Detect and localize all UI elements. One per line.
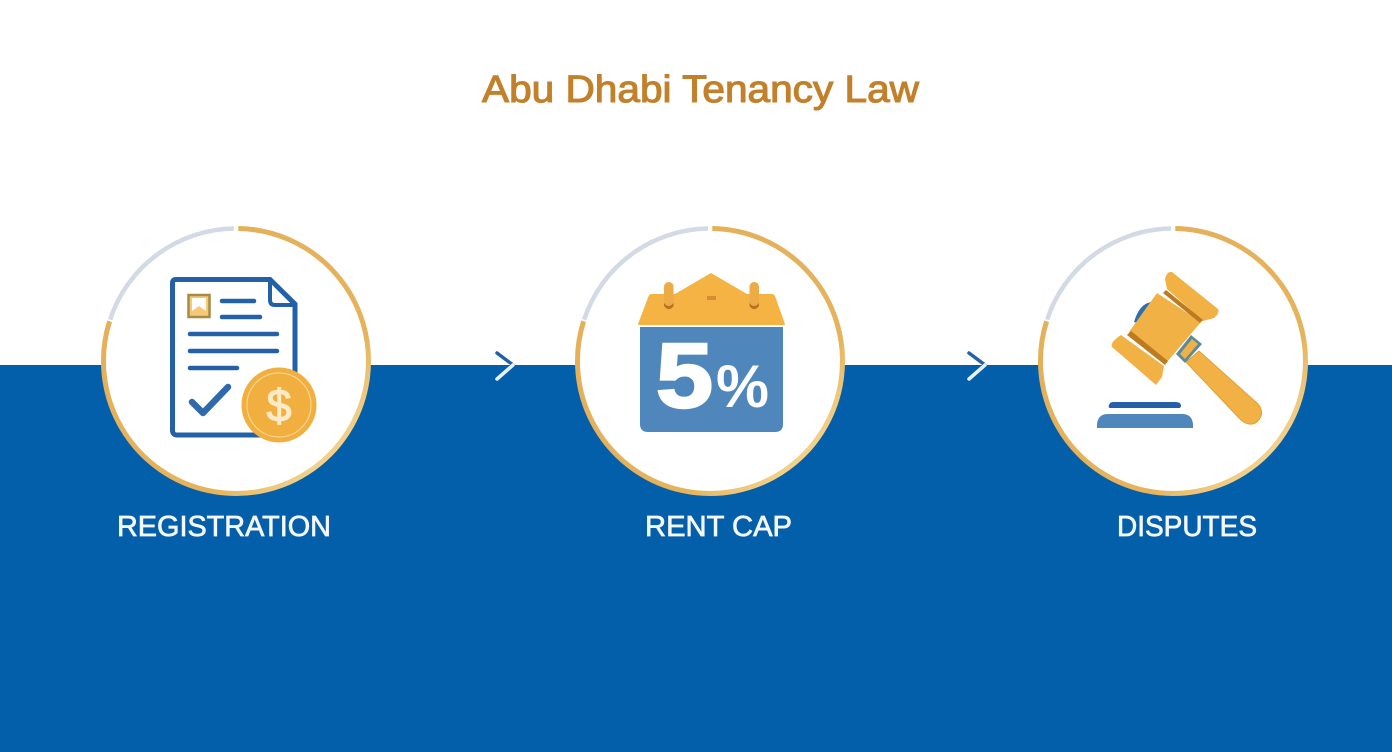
blue lower background band xyxy=(0,365,1392,752)
arrow: rent cap to disputes xyxy=(969,353,985,379)
icon: document with dollar coin xyxy=(172,280,316,442)
icon: document with dollar coin: $ xyxy=(266,380,292,431)
icon: gavel and sound block xyxy=(1097,272,1262,428)
icon: calendar with 5 percent: % xyxy=(716,353,769,420)
label: registration: REGISTRATION xyxy=(117,511,331,543)
step 2 circle: rent cap xyxy=(577,228,842,493)
label: rent cap: RENT CAP xyxy=(645,511,792,543)
icon: calendar with 5 percent xyxy=(638,273,785,432)
step 1 circle: registration xyxy=(103,228,368,493)
label: disputes: DISPUTES xyxy=(1117,511,1257,543)
arrow: registration to rent cap xyxy=(497,353,513,379)
step 3 circle: disputes xyxy=(1040,228,1305,493)
title: Abu Dhabi Tenancy Law xyxy=(482,69,920,111)
icon: calendar with 5 percent: 5 xyxy=(656,325,713,427)
